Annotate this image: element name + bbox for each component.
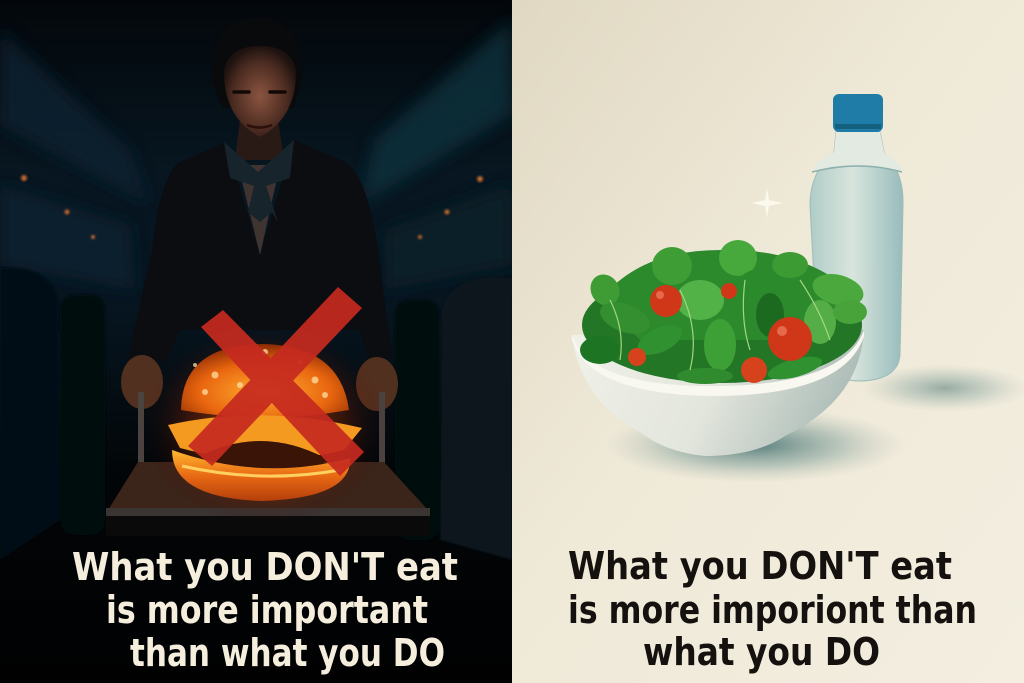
cabin overhead bins	[0, 20, 512, 290]
face	[224, 46, 296, 137]
icon: salad greens	[580, 240, 867, 384]
neck	[235, 120, 284, 160]
panel: dark airplane cabin	[0, 0, 512, 683]
icon: white bowl	[572, 330, 864, 456]
sparkle	[751, 188, 783, 218]
icon: glowing burger	[140, 325, 390, 525]
panel: bright salad and water	[512, 0, 1024, 683]
caption: right slogan	[568, 544, 977, 674]
icon: water bottle	[751, 94, 903, 381]
serving cart	[106, 392, 430, 536]
icon: red X mark	[188, 287, 364, 476]
flight attendant	[121, 17, 398, 411]
caption: left slogan: is more important	[106, 588, 428, 632]
jacket	[128, 140, 392, 362]
scarf	[224, 140, 294, 222]
aisle seats	[0, 268, 512, 560]
caption: right slogan: What you DON'T eat	[568, 544, 952, 588]
caption: right slogan: what you DO	[643, 630, 880, 674]
hair	[212, 17, 302, 108]
shadows	[605, 364, 1024, 483]
caption: left slogan: What you DON'T eat	[72, 545, 458, 589]
caption: left slogan	[72, 545, 458, 675]
bottle cap	[833, 94, 883, 132]
cabin lights	[21, 175, 483, 239]
tomatoes	[628, 283, 812, 383]
shirt collar	[238, 165, 280, 255]
caption: left slogan: than what you DO	[130, 631, 445, 675]
hands	[121, 355, 163, 409]
